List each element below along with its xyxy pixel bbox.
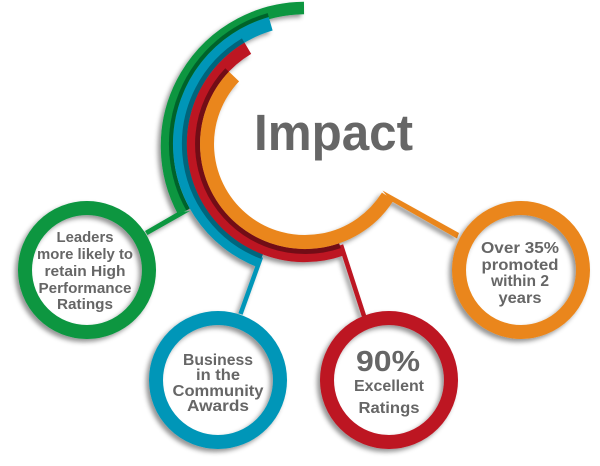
ring: red [327, 318, 451, 442]
text: leaders: Leaders [56, 229, 114, 246]
text: business: Business [183, 352, 253, 369]
stat: 90%: 90% [356, 346, 420, 378]
callout: green circle [25, 208, 149, 332]
connector: orange [382, 190, 459, 238]
arc: red [193, 48, 341, 256]
title: Impact [254, 104, 413, 161]
text: promoted: years [498, 290, 542, 307]
text: excellent ratings [354, 378, 425, 417]
text: leaders: Performance [38, 280, 132, 297]
text: excellent ratings: Ratings [358, 400, 420, 417]
text: promoted [481, 240, 559, 307]
text: leaders: retain High [44, 263, 126, 280]
text: leaders: more likely to [37, 246, 133, 263]
text: promoted: within 2 [490, 273, 549, 290]
text: promoted: Over 35% [481, 240, 559, 257]
arc: red inner shade [198, 70, 340, 251]
ring: green [25, 208, 149, 332]
text: leaders [37, 229, 133, 313]
arc: green inner shade [171, 15, 268, 209]
arc: green [167, 8, 304, 212]
text: leaders: Ratings [57, 296, 113, 313]
ring: blue [156, 318, 280, 442]
connector: blue [240, 257, 261, 314]
text: business: Awards [187, 398, 249, 415]
connector: green [145, 211, 190, 235]
connector: red [341, 245, 364, 316]
ring: orange [459, 208, 583, 332]
text: business [172, 352, 264, 415]
callout: blue circle [156, 318, 280, 442]
concentric arcs and connectors [145, 8, 459, 316]
arc: blue inner shade [184, 40, 262, 257]
text: business: Community [172, 383, 264, 400]
callout: red circle [327, 318, 451, 442]
callout: orange circle [459, 208, 583, 332]
arc: blue [180, 24, 271, 261]
text: promoted: promoted [482, 257, 558, 274]
text: business: in the [196, 367, 240, 384]
text: excellent ratings: Excellent [354, 378, 425, 395]
arc: orange [207, 76, 388, 242]
